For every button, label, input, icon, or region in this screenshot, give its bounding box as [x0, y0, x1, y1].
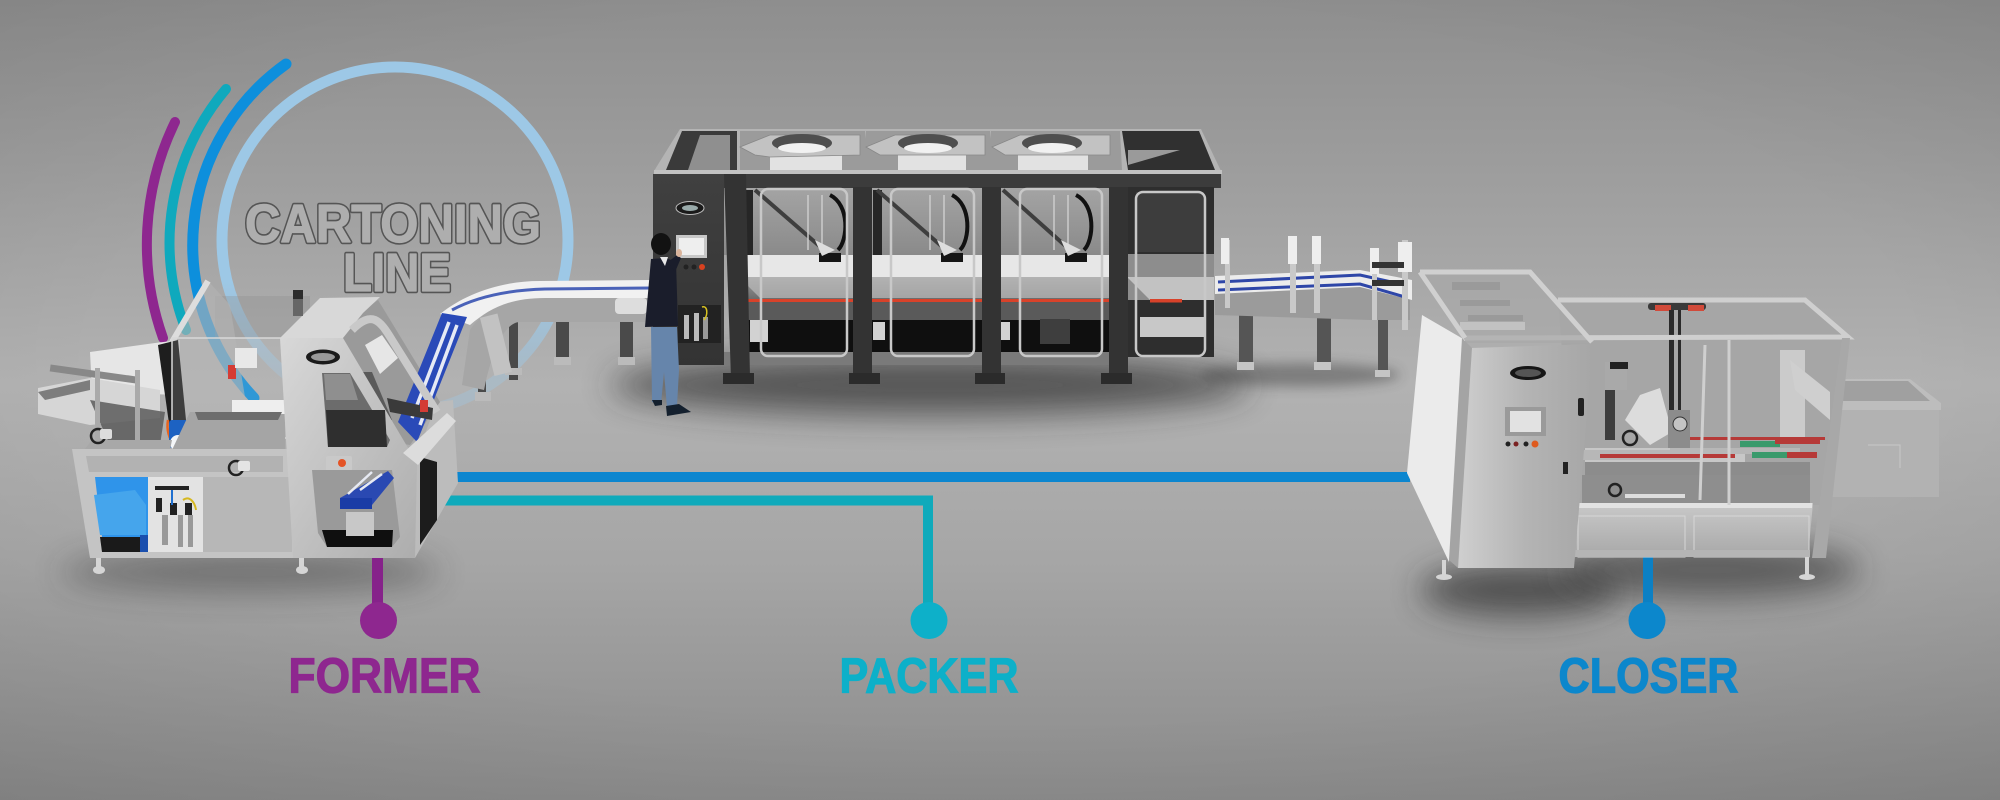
title inner layer: LINE — [343, 243, 451, 303]
upper window — [322, 373, 390, 447]
label: CLOSER — [1558, 650, 1738, 704]
arc: purple — [147, 122, 175, 338]
side bracket — [480, 313, 512, 376]
hand — [676, 249, 682, 257]
white infeed band — [739, 255, 1127, 277]
right bay — [1127, 187, 1214, 357]
closer buttons — [1506, 440, 1538, 448]
black bar with red clip — [387, 398, 433, 420]
robot 3 — [1003, 190, 1091, 262]
conveyor gray side — [1215, 282, 1410, 320]
former base cabinet — [72, 449, 300, 558]
former back glass frame — [170, 281, 252, 440]
lower blue conveyor — [340, 471, 394, 505]
label: FORMER — [288, 650, 480, 704]
jeans — [651, 327, 679, 408]
closer interior glass — [1558, 300, 1848, 505]
machine: closer — [1407, 272, 1941, 580]
overhead head — [1648, 303, 1706, 425]
shoes — [666, 404, 691, 416]
closer right post — [1812, 338, 1850, 558]
rear tower side — [415, 400, 458, 558]
tower front face — [280, 338, 417, 558]
connector: former purple stem — [372, 550, 383, 615]
title: cartoning line — [245, 194, 541, 303]
frame front lip — [654, 170, 1222, 174]
orange hose and blue cap — [167, 420, 175, 446]
conveyor body — [739, 277, 1149, 300]
left cabinet — [653, 174, 724, 365]
title outline layer — [245, 194, 541, 303]
closer door handles — [1563, 462, 1568, 474]
machine: former — [38, 281, 467, 574]
lower body — [739, 302, 1127, 320]
callout: packer — [840, 602, 1018, 704]
connector: closer stem — [1643, 550, 1653, 615]
connector: closer blue line — [450, 472, 1410, 482]
conveyor side rail — [462, 298, 652, 390]
machine: packer — [653, 129, 1222, 384]
arched guard — [352, 319, 437, 412]
red rail — [745, 299, 1181, 302]
base top strip — [86, 456, 283, 472]
lower window — [312, 470, 400, 547]
robot 2 — [877, 190, 967, 262]
blue incline belt — [398, 313, 467, 442]
pneumatic panel — [148, 477, 203, 552]
closer white side panel — [1407, 315, 1465, 562]
decorative ring: light blue circle — [222, 67, 568, 413]
delta robots — [755, 190, 1091, 262]
tower inner void — [338, 300, 440, 445]
closer rear table — [1829, 379, 1941, 497]
dot — [1628, 602, 1666, 639]
column feet — [723, 373, 1132, 384]
former logo — [306, 350, 340, 364]
dot — [360, 602, 397, 639]
feet — [93, 558, 308, 574]
frame band — [653, 174, 1221, 188]
infeed lower sleeve — [38, 378, 160, 425]
interior upper — [724, 188, 1127, 255]
title inner layer: CARTONING — [245, 194, 541, 254]
conveyor blue stripe — [452, 288, 652, 310]
floor shadows — [60, 355, 1860, 616]
blue control box — [95, 477, 148, 537]
arm — [668, 255, 681, 272]
closer upper box frame — [1420, 272, 1595, 343]
closer cabinet face — [1458, 344, 1593, 568]
red clip and small card — [228, 365, 236, 379]
columns — [724, 174, 1128, 379]
left top bay — [666, 131, 737, 170]
guide posts — [1225, 237, 1408, 330]
infeed tray rear — [90, 340, 180, 395]
guard doors — [761, 189, 1205, 356]
control box — [326, 456, 352, 471]
red product trays — [1775, 437, 1820, 458]
conveyor legs — [478, 312, 633, 393]
top frame — [654, 129, 1221, 171]
base door — [197, 477, 292, 552]
hoppers — [740, 131, 1122, 170]
pneumatic panel — [678, 305, 721, 343]
handwheels — [91, 429, 250, 475]
right guard detail — [1780, 350, 1805, 440]
closer feet — [1436, 557, 1815, 580]
conveyor white belt — [1215, 270, 1412, 300]
title outline layer: CARTONING — [245, 194, 541, 254]
title outline layer: LINE — [343, 243, 451, 303]
operator figure — [645, 233, 691, 416]
green product rows — [1740, 441, 1787, 458]
conveyor legs — [1239, 308, 1388, 370]
closer logo — [1510, 366, 1546, 380]
title inner layer — [245, 194, 541, 303]
outfeed chute — [403, 413, 456, 465]
machine: curved conveyor to packer — [440, 280, 652, 401]
conveyor blue stripes — [1218, 275, 1405, 297]
closer frame — [1465, 300, 1848, 505]
tower top — [280, 297, 380, 338]
connector: packer teal line — [440, 500, 928, 615]
dot — [910, 602, 948, 639]
top deck — [172, 412, 285, 450]
dark lower compartment — [100, 537, 157, 552]
right top bay — [1122, 131, 1215, 170]
closer HMI — [1505, 407, 1546, 436]
conveyor assembly — [1582, 362, 1825, 503]
machine: right conveyor — [1215, 236, 1412, 377]
HMI screen — [676, 235, 707, 258]
robot 1 — [755, 190, 845, 262]
arc: blue — [193, 64, 286, 398]
buttons — [684, 264, 705, 270]
callout: former — [288, 602, 480, 704]
guide tops — [1221, 236, 1412, 274]
closer lower panels — [1574, 503, 1813, 557]
head — [651, 233, 671, 255]
callout: closer — [1558, 602, 1738, 704]
translucent guard panel behind former — [215, 296, 310, 338]
arc: teal — [170, 89, 226, 330]
conveyor white belt — [440, 280, 652, 325]
packer logo — [676, 202, 704, 214]
collar — [660, 257, 668, 266]
jacket — [645, 258, 678, 327]
label: PACKER — [840, 650, 1018, 704]
